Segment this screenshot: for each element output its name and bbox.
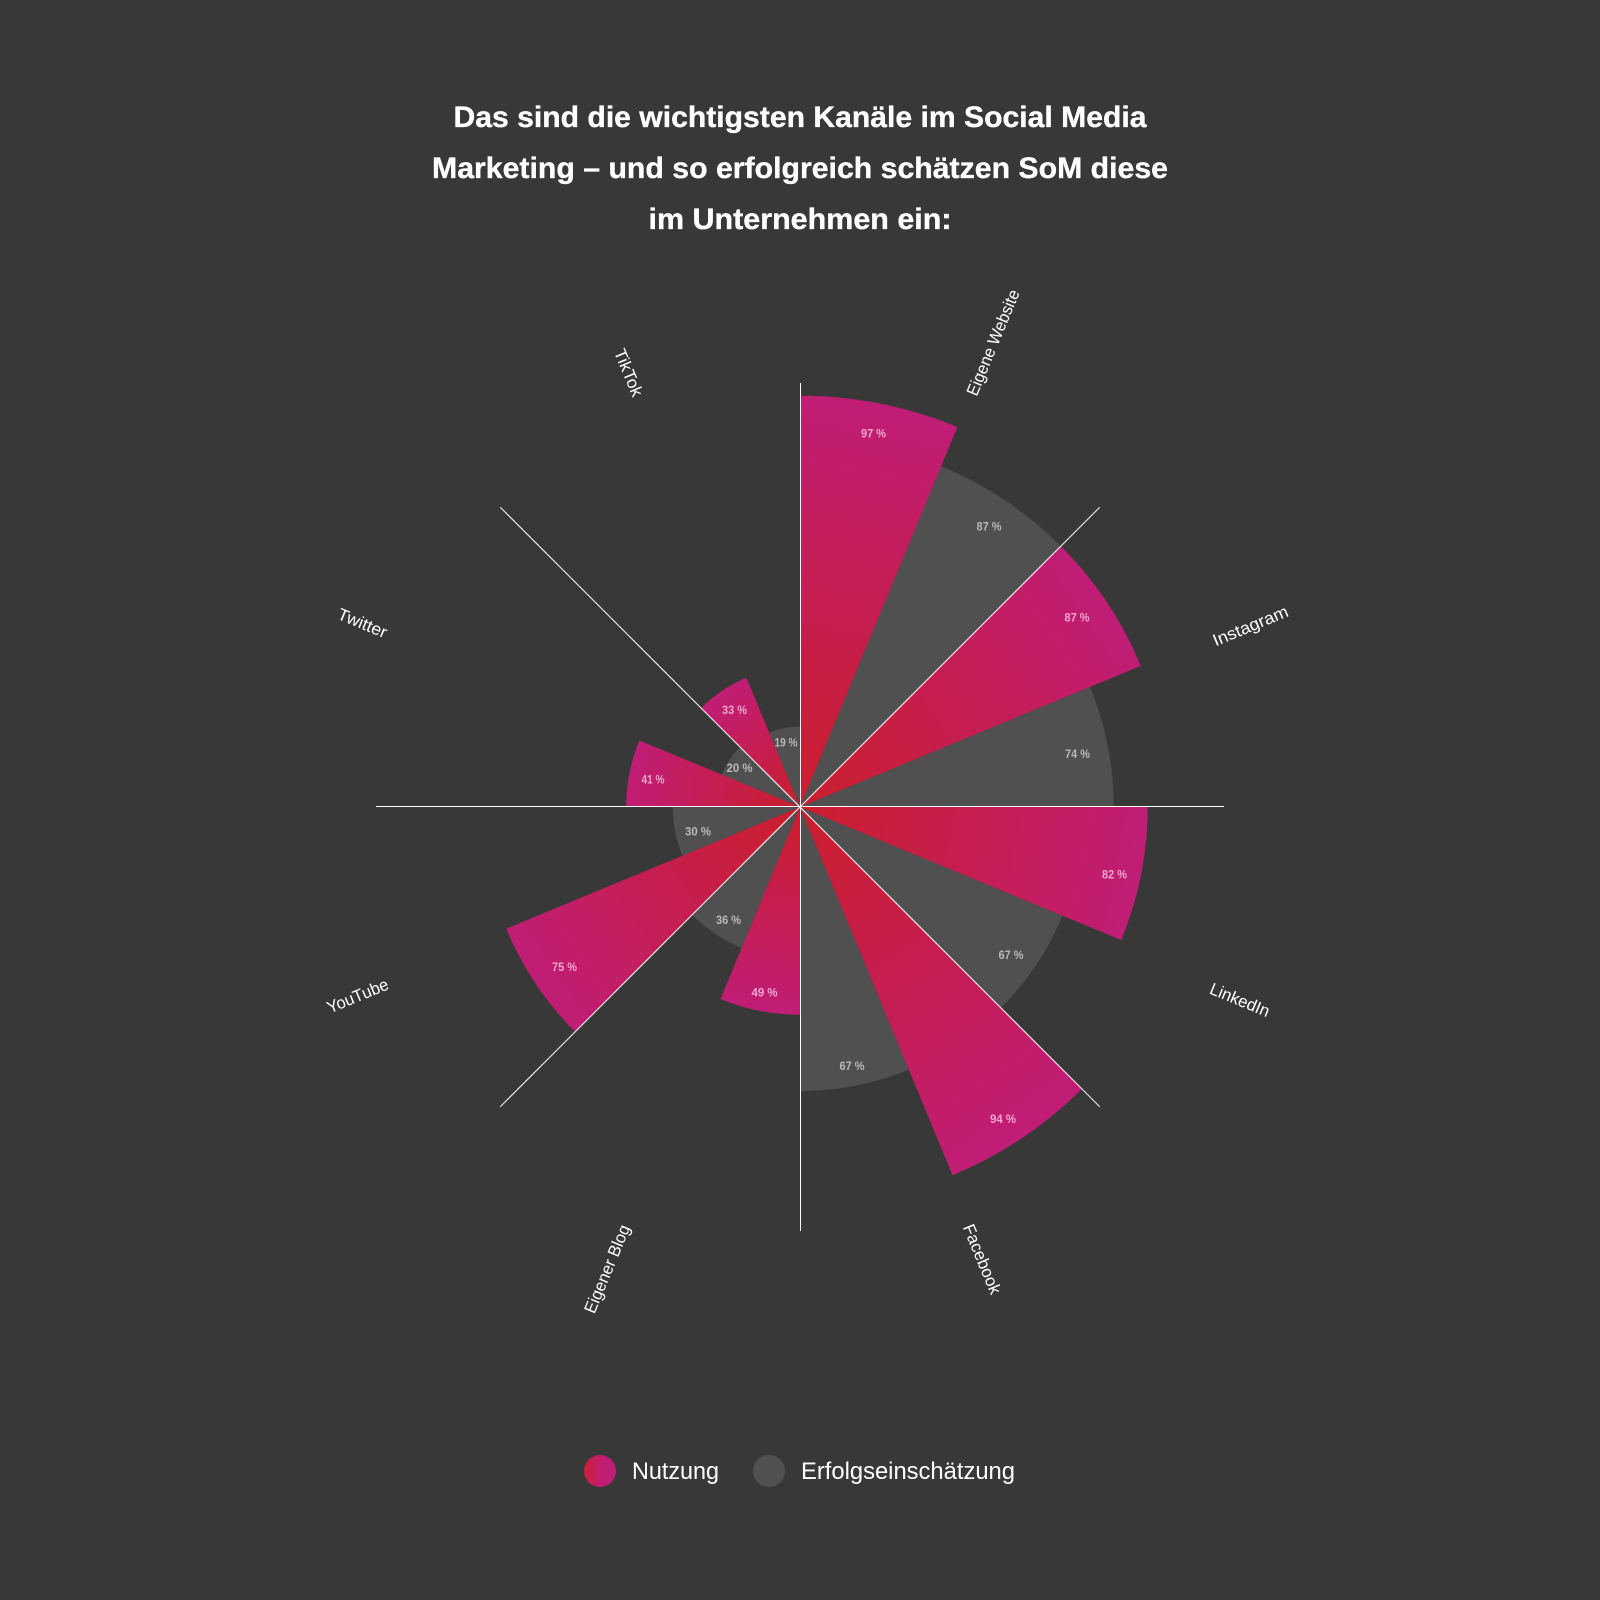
title [432, 101, 1168, 236]
value labels: 67 % [840, 1059, 865, 1073]
value labels: 41 % [642, 772, 665, 786]
category labels: Facebook [959, 1221, 1005, 1297]
value labels: 30 % [685, 824, 711, 838]
legend [584, 1455, 1015, 1487]
usage sector: Twitter [626, 740, 800, 807]
gray sector: Eigener Blog [692, 807, 800, 948]
usage sector: Instagram [800, 546, 1141, 807]
value labels: 75 % [552, 960, 577, 974]
value labels [552, 426, 1127, 1126]
usage sector: Facebook [800, 807, 1082, 1175]
value labels: 19 % [774, 736, 798, 750]
category labels [324, 287, 1291, 1316]
category labels: TikTok [610, 346, 647, 400]
gray sector: YouTube [673, 807, 800, 856]
category labels: Instagram [1210, 602, 1291, 650]
title: im Unternehmen ein: [648, 203, 952, 236]
gray sector: Facebook [800, 807, 909, 1091]
usage sector: LinkedIn [800, 807, 1148, 940]
usage sector: Eigene Website [800, 396, 957, 807]
gray sector: Eigene Website [800, 466, 1061, 807]
category labels: Eigener Blog [581, 1222, 634, 1316]
gray sector: Instagram [800, 687, 1114, 807]
value labels: 67 % [998, 948, 1024, 962]
gray sector: Twitter [722, 747, 800, 807]
category labels: LinkedIn [1207, 979, 1273, 1021]
value labels: 87 % [1064, 610, 1090, 624]
legend label: Erfolgseinschätzung: Erfolgseinschätzung [801, 1458, 1015, 1485]
legend label: Nutzung: Nutzung [632, 1458, 719, 1485]
legend swatch: Nutzung [584, 1455, 616, 1487]
value labels: 49 % [752, 986, 778, 1000]
title: Marketing – und so erfolgreich schätzen SoM diese [432, 152, 1168, 185]
usage sector: TikTok [701, 678, 800, 807]
value labels: 87 % [976, 520, 1002, 534]
value labels: 20 % [726, 761, 753, 775]
category labels: Eigene Website [963, 287, 1024, 398]
title: Das sind die wichtigsten Kanäle im Social Media [454, 101, 1147, 134]
gray sector: TikTok [769, 726, 800, 807]
polar area chart [324, 287, 1291, 1316]
usage sector: YouTube [506, 807, 800, 1032]
value labels: 74 % [1065, 747, 1090, 761]
value labels: 82 % [1102, 868, 1127, 882]
value labels: 36 % [716, 913, 741, 927]
category labels: YouTube [324, 975, 391, 1017]
value labels: 97 % [861, 426, 886, 440]
legend swatch: Erfolgseinschätzung [753, 1455, 785, 1487]
value labels: 94 % [990, 1112, 1016, 1126]
value labels: 33 % [722, 703, 747, 717]
usage sector: Eigener Blog [720, 807, 800, 1015]
gray sector: LinkedIn [800, 807, 1062, 1008]
category labels: Twitter [335, 605, 390, 642]
